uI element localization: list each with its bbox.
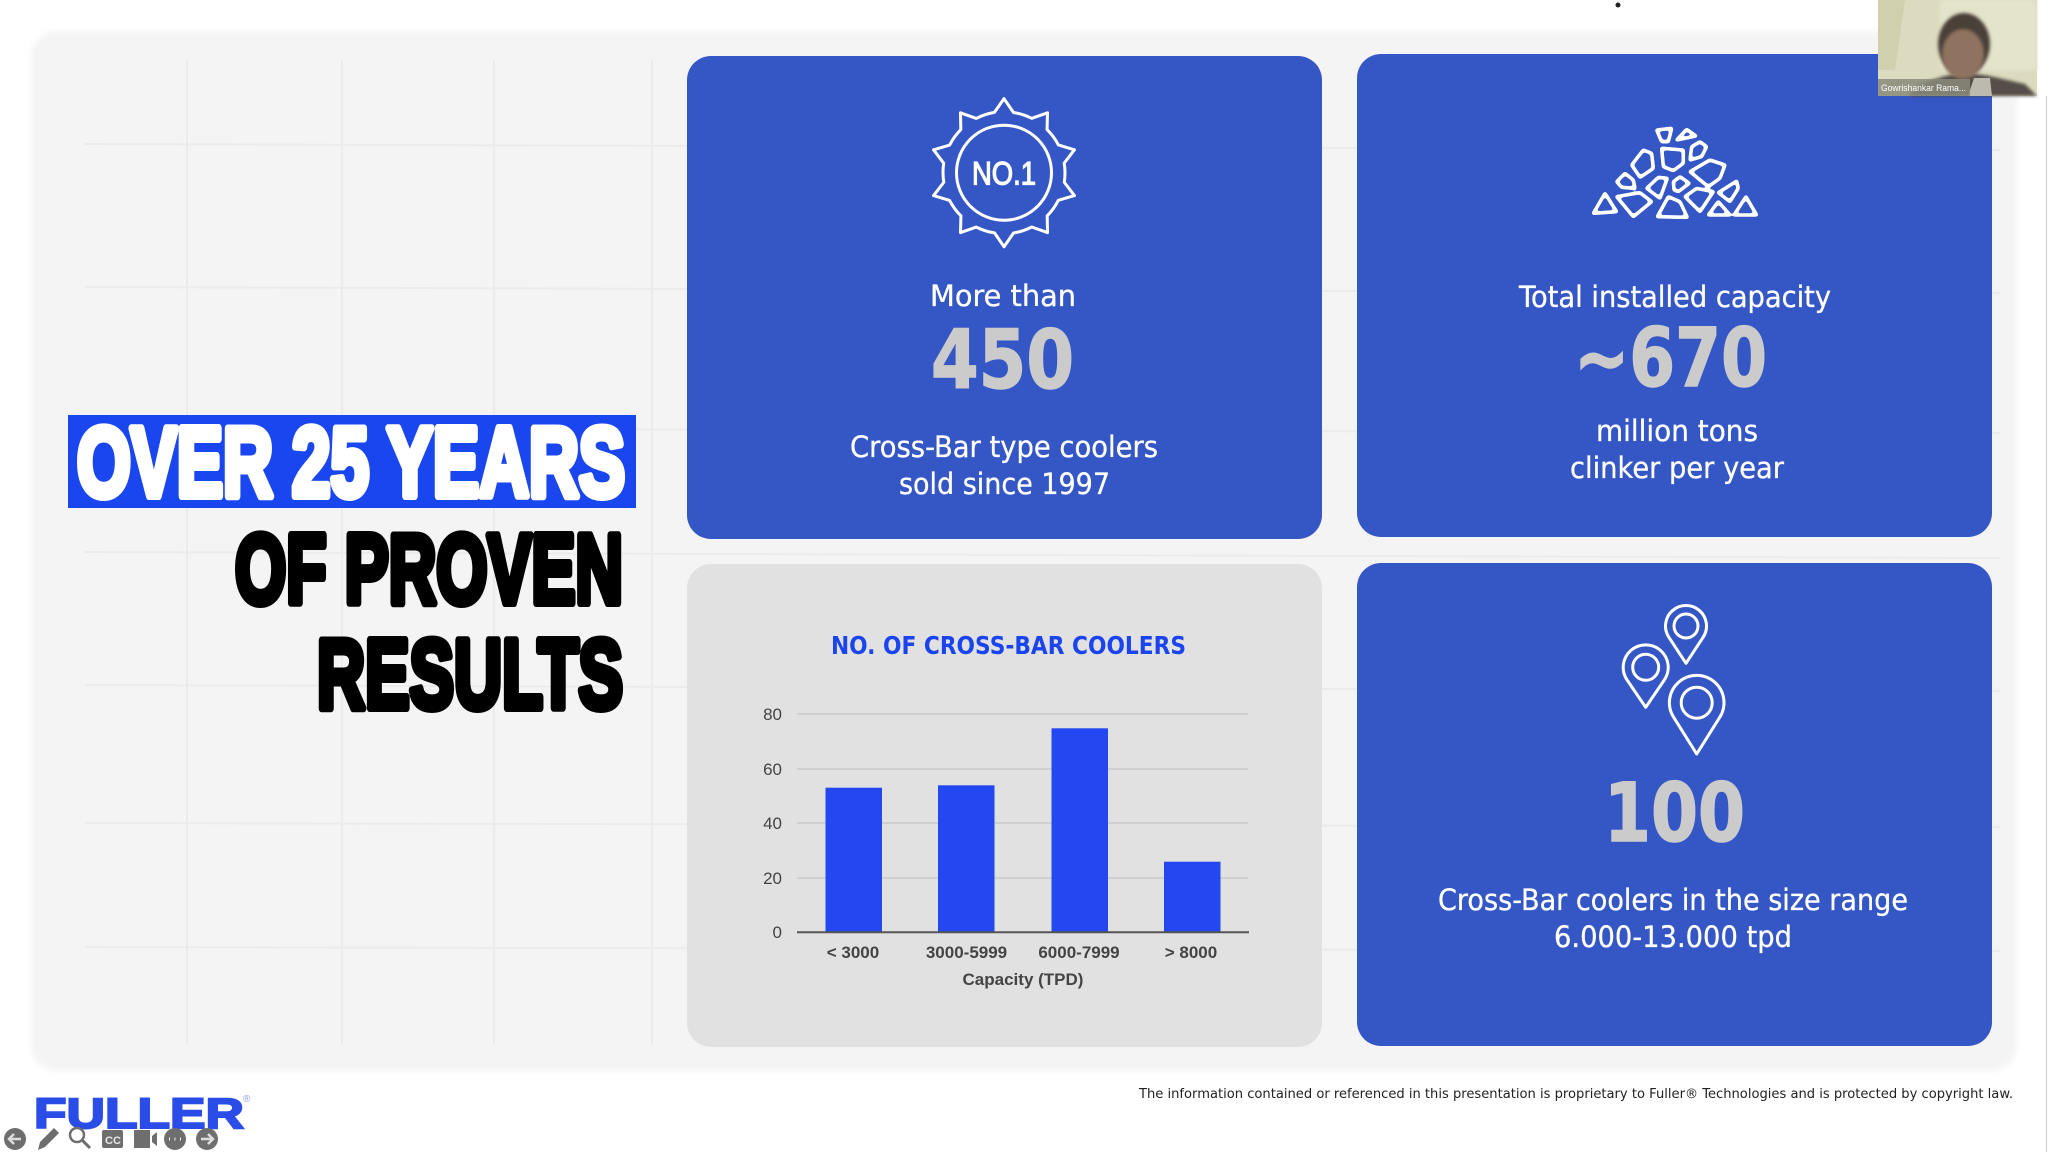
y axis labels <box>763 705 782 942</box>
webcam overlay <box>1878 0 2037 96</box>
logo: fuller: ® <box>243 1094 251 1105</box>
icon: forward arrow <box>196 1128 218 1150</box>
bar chart <box>763 705 1249 989</box>
text: tpd range: 6.000-13.000 tpd <box>1554 920 1792 954</box>
icon: captions <box>102 1130 123 1148</box>
icon: more dots <box>164 1128 186 1150</box>
title <box>68 407 636 729</box>
number: 450: 450 <box>931 314 1074 408</box>
title line 1: OVER 25 YEARS <box>77 407 625 517</box>
y axis labels: 60 <box>763 760 782 779</box>
text: cross-bar coolers in size range: Cross-Bar coolers in the size range <box>1438 883 1908 917</box>
title line 2: OF PROVEN <box>235 514 623 624</box>
y axis labels: 0 <box>773 923 782 942</box>
icon: map pins <box>1623 605 1724 754</box>
x axis labels: < 3000 <box>827 943 879 962</box>
x axis labels: 3000-5999 <box>926 943 1007 962</box>
footer notice: The information contained or referenced in this presentation is proprietary to Fuller® Technologies and is protected by copyright law. <box>1138 1086 2013 1102</box>
text: million tons: million tons <box>1596 414 1758 448</box>
x axis labels <box>827 943 1217 962</box>
x axis title: Capacity (TPD) <box>963 970 1083 989</box>
panel: bar chart card <box>687 564 1322 1047</box>
icon: back arrow <box>4 1128 26 1150</box>
text: cross-bar type coolers: Cross-Bar type coolers <box>850 430 1158 464</box>
presentation toolbar icons <box>4 1128 218 1150</box>
icon: no.1 badge <box>920 87 1088 258</box>
title line 3: RESULTS <box>317 619 623 729</box>
text: clinker per year: clinker per year <box>1570 451 1784 485</box>
icon: camera <box>134 1130 157 1148</box>
chart title: NO. OF CROSS-BAR COOLERS <box>831 631 1186 660</box>
text: sold since 1997: sold since 1997 <box>899 467 1110 501</box>
icon: magnifier <box>70 1128 90 1148</box>
y axis labels: 80 <box>763 705 782 724</box>
x axis labels: > 8000 <box>1165 943 1217 962</box>
panel: coolers sold <box>687 56 1322 539</box>
panel: size range <box>1357 563 1992 1046</box>
icon: no.1 badge: NO.1 <box>972 156 1036 192</box>
icon: pencil <box>38 1128 59 1150</box>
text: total installed capacity: Total installed capacity <box>1518 280 1831 314</box>
number: 670: ~670 <box>1574 312 1767 406</box>
number: 100: 100 <box>1604 767 1745 861</box>
bars <box>826 728 1220 932</box>
text: more than: More than <box>930 279 1076 313</box>
logo: fuller: FULLER <box>34 1090 244 1138</box>
webcam overlay: Gowrishankar Rama... <box>1881 83 1966 94</box>
title highlight box <box>68 415 636 508</box>
y axis labels: 40 <box>763 814 782 833</box>
cursor <box>1616 2 1620 8</box>
y axis labels: 20 <box>763 869 782 888</box>
x axis labels: 6000-7999 <box>1038 943 1120 962</box>
icon: clinker pile <box>1593 128 1757 217</box>
icon: captions: CC <box>105 1135 121 1147</box>
panel: installed capacity <box>1357 54 1992 537</box>
